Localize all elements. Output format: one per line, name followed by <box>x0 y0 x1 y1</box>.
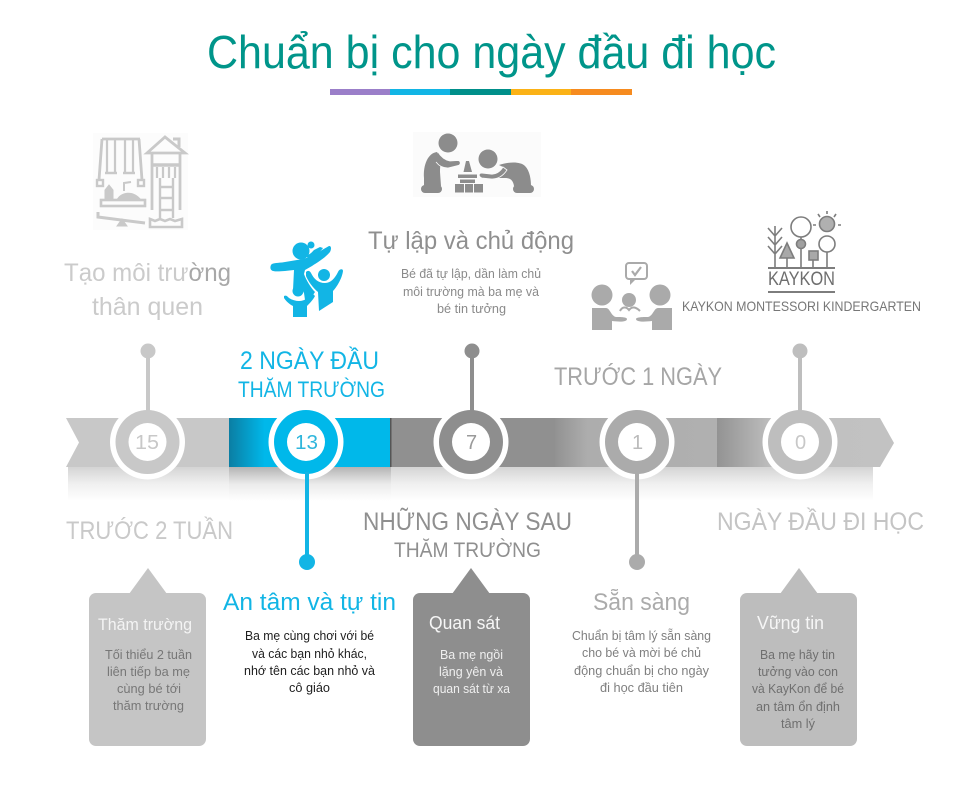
heading: Tạo môi trường thân quen <box>64 259 231 321</box>
panel: vững tin <box>740 568 857 746</box>
label: 2 ngày đầu thăm trường <box>238 346 385 402</box>
panel: thăm trường <box>89 568 206 746</box>
marker stem: 7 <box>464 344 480 413</box>
marker: 7: 7 <box>466 432 477 454</box>
panel text: vững tin <box>752 647 844 731</box>
marker: 0 <box>762 404 838 480</box>
panel text: quan sát: lặng yên và <box>439 664 504 679</box>
panel text: thăm trường: thăm trường <box>113 698 184 713</box>
panel text: vững tin: và KayKon để bé <box>752 681 844 696</box>
label: ngày đầu đi học: NGÀY ĐẦU ĐI HỌC <box>717 507 924 536</box>
panel heading: quan sát: Quan sát <box>429 613 500 633</box>
text: an tâm description: và các bạn nhỏ khác, <box>252 646 367 661</box>
text: an tâm description <box>244 628 376 695</box>
marker stem: 1 <box>629 472 645 570</box>
panel text: thăm trường: liên tiếp ba mẹ <box>107 664 190 679</box>
marker stem: 0 <box>792 344 808 413</box>
label: 2 ngày đầu thăm trường: 2 NGÀY ĐẦU <box>240 346 379 375</box>
marker stem: 13 <box>299 472 315 570</box>
text: an tâm description: cô giáo <box>289 680 330 695</box>
icon: playground <box>97 137 185 227</box>
title colour bar <box>330 89 632 95</box>
marker: 7 <box>434 404 508 480</box>
panel text: quan sát <box>433 647 511 696</box>
panel text: vững tin: tâm lý <box>781 716 815 731</box>
icon: children building blocks <box>421 134 534 193</box>
text: Tự lập description <box>401 266 541 316</box>
panel text: vững tin: Ba mẹ hãy tin <box>760 647 835 662</box>
marker: 1 <box>600 404 674 480</box>
heading: Tạo môi trường thân quen: Tạo môi trường <box>64 259 231 287</box>
panel text: quan sát: Ba mẹ ngồi <box>440 647 503 662</box>
timeline ribbon <box>66 418 894 467</box>
panel: quan sát <box>413 568 530 746</box>
text: Tự lập description: môi trường mà ba mẹ và <box>403 284 540 299</box>
text: sẵn sàng description: đi học đầu tiên <box>600 680 683 695</box>
marker: 0: 0 <box>795 432 806 454</box>
marker: 15: 15 <box>135 432 159 454</box>
heading: an tâm và tự tin: An tâm và tự tin <box>223 589 396 616</box>
text: Tự lập description: Bé đã tự lập, dần làm chủ <box>401 266 541 281</box>
icon: KayKon logo <box>768 211 841 292</box>
heading: sẵn sàng: Sẵn sàng <box>593 588 690 616</box>
label: 2 ngày đầu thăm trường: THĂM TRƯỜNG <box>238 377 385 402</box>
text: sẵn sàng description: Chuẩn bị tâm lý sẵn sàng <box>572 628 711 643</box>
label: trước 2 tuần: TRƯỚC 2 TUẦN <box>66 516 233 545</box>
panel text: thăm trường: cùng bé tới <box>117 681 181 696</box>
panel text: vững tin: an tâm ổn định <box>756 699 840 714</box>
ribbon shadow <box>68 467 873 501</box>
label: những ngày sau thăm trường <box>363 507 572 562</box>
panel text: vững tin: tưởng vào con <box>758 664 838 679</box>
panel text: quan sát: quan sát từ xa <box>433 681 511 696</box>
logo wordmark: KAYKON <box>768 269 835 290</box>
icon: family <box>270 242 343 317</box>
marker stem: 15 <box>140 344 156 413</box>
icon: parents and child dialogue <box>592 263 672 330</box>
panel heading: thăm trường: Thăm trường <box>98 615 192 634</box>
logo caption: KAYKON MONTESSORI KINDERGARTEN <box>682 298 921 314</box>
panel text: thăm trường: Tối thiểu 2 tuần <box>105 647 192 662</box>
text: sẵn sàng description: động chuẩn bị cho ngày <box>574 663 709 678</box>
text: an tâm description: nhớ tên các bạn nhỏ và <box>244 663 376 678</box>
panel heading: vững tin: Vững tin <box>757 613 824 633</box>
marker: 13: 13 <box>295 432 318 454</box>
title: Chuẩn bị cho ngày đầu đi học <box>207 26 776 78</box>
marker: 15 <box>110 404 185 480</box>
marker: 13 <box>268 404 344 480</box>
label: những ngày sau thăm trường: NHỮNG NGÀY SAU <box>363 507 572 536</box>
text: sẵn sàng description <box>572 628 711 695</box>
text: Tự lập description: bé tin tưởng <box>437 301 506 316</box>
heading: Tạo môi trường thân quen: thân quen <box>92 293 203 321</box>
label: trước 1 ngày: TRƯỚC 1 NGÀY <box>554 362 722 391</box>
marker: 1: 1 <box>632 432 643 454</box>
panel text: thăm trường <box>105 647 192 713</box>
heading: Tự lập và chủ động: Tự lập và chủ động <box>368 227 574 255</box>
label: những ngày sau thăm trường: THĂM TRƯỜNG <box>394 539 541 562</box>
text: sẵn sàng description: cho bé và mời bé chủ <box>582 645 701 660</box>
text: an tâm description: Ba mẹ cùng chơi với bé <box>245 628 374 643</box>
